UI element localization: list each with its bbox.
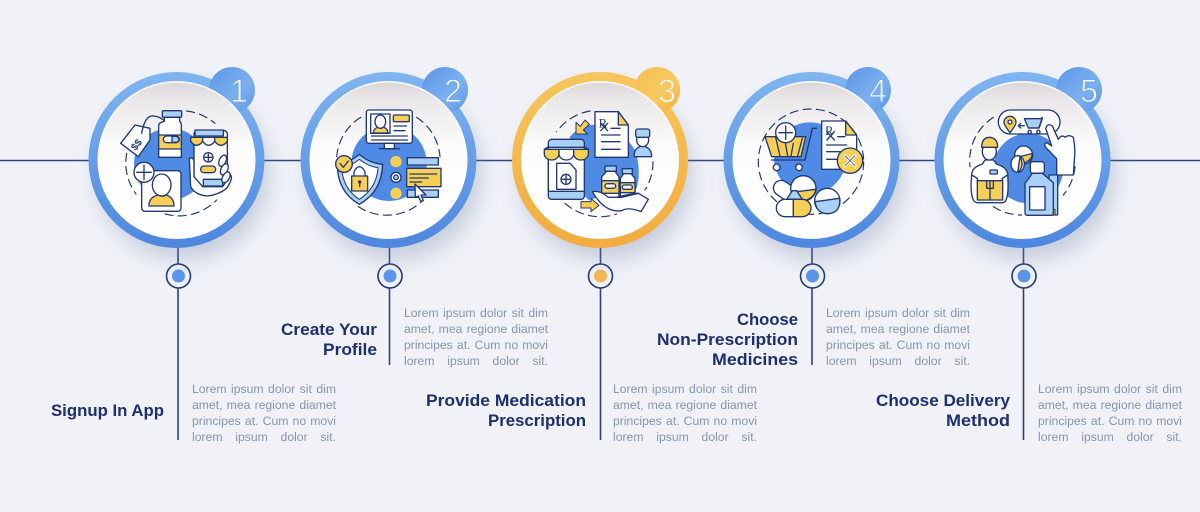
text block 2: Lorem ipsum dolor sit dim bbox=[404, 306, 548, 320]
medallion 1 bbox=[88, 67, 269, 260]
icon: non-prescription medicines: R bbox=[825, 124, 834, 138]
text block 4: Lorem ipsum dolor sit dim bbox=[826, 306, 970, 320]
step 3 graphic bbox=[512, 67, 692, 440]
heading: Choose Delivery Method: Choose Delivery bbox=[876, 391, 1011, 410]
connector and marker 4 bbox=[800, 245, 824, 365]
text block 4 bbox=[826, 306, 970, 368]
text block 1 bbox=[192, 382, 336, 444]
text block 4: amet, mea regione diamet bbox=[826, 322, 970, 336]
timeline line bbox=[0, 160, 1200, 162]
text block 3: Lorem ipsum dolor sit dim bbox=[613, 382, 757, 396]
heading: Provide Medication Prescription bbox=[426, 391, 586, 430]
text block 3 bbox=[613, 382, 757, 444]
heading: Choose Non-Prescription Medicines: Choose bbox=[737, 310, 798, 329]
heading: Create Your Profile bbox=[281, 320, 377, 359]
step 1 graphic bbox=[88, 67, 269, 440]
icon: non-prescription medicines bbox=[758, 109, 864, 217]
connector and marker 2 bbox=[378, 245, 402, 365]
text block 3: lorem ipsum dolor sit. bbox=[613, 430, 757, 444]
text block 5: lorem ipsum dolor sit. bbox=[1038, 430, 1182, 444]
number 2: 2 bbox=[444, 73, 462, 109]
text block 2: principes at. Cum no movi bbox=[404, 338, 548, 352]
number 3: 3 bbox=[658, 73, 676, 109]
number 1: 1 bbox=[230, 73, 248, 109]
icon: profile security bbox=[336, 110, 441, 215]
heading: Create Your Profile: Profile bbox=[323, 340, 377, 359]
heading: Choose Delivery Method bbox=[876, 391, 1011, 430]
step 4 graphic bbox=[724, 67, 904, 365]
text block 1: amet, mea regione diamet bbox=[192, 398, 336, 412]
medallion 2 bbox=[300, 67, 481, 260]
text block 1: principes at. Cum no movi bbox=[192, 414, 336, 428]
medallion 5 bbox=[934, 67, 1115, 260]
text block 5: principes at. Cum no movi bbox=[1038, 414, 1182, 428]
text block 3: principes at. Cum no movi bbox=[613, 414, 757, 428]
number 5: 5 bbox=[1080, 73, 1098, 109]
step 2 graphic bbox=[300, 67, 481, 365]
text block 5: Lorem ipsum dolor sit dim bbox=[1038, 382, 1182, 396]
heading: Provide Medication Prescription: Prescription bbox=[488, 411, 586, 430]
heading: Create Your Profile: Create Your bbox=[281, 320, 377, 339]
step 5 graphic bbox=[934, 67, 1115, 440]
connector and marker 1 bbox=[166, 245, 190, 440]
text block 2 bbox=[404, 306, 548, 368]
text block 1: lorem ipsum dolor sit. bbox=[192, 430, 336, 444]
text block 5: amet, mea regione diamet bbox=[1038, 398, 1182, 412]
heading: Choose Non-Prescription Medicines: Non-Prescription bbox=[657, 330, 798, 349]
connector and marker 3 bbox=[588, 245, 612, 440]
heading: Signup In App: Signup In App bbox=[51, 401, 164, 420]
medallion 4 bbox=[724, 67, 904, 260]
icon: pharmacy app signup bbox=[121, 111, 232, 216]
connector and marker 5 bbox=[1012, 245, 1036, 440]
text block 3: amet, mea regione diamet bbox=[613, 398, 757, 412]
icon: medication prescription: R bbox=[599, 116, 608, 130]
medallion 3 bbox=[512, 67, 692, 260]
text block 2: amet, mea regione diamet bbox=[404, 322, 548, 336]
heading: Choose Non-Prescription Medicines bbox=[657, 310, 798, 369]
number 4: 4 bbox=[869, 73, 887, 109]
heading: Choose Delivery Method: Method bbox=[946, 411, 1010, 430]
heading: Provide Medication Prescription: Provide Medication bbox=[426, 391, 586, 410]
icon: pharmacy app signup: $$ bbox=[129, 137, 145, 153]
icon: delivery method bbox=[970, 110, 1075, 215]
text block 5 bbox=[1038, 382, 1182, 444]
text block 2: lorem ipsum dolor sit. bbox=[404, 354, 548, 368]
text block 4: lorem ipsum dolor sit. bbox=[826, 354, 970, 368]
icon: medication prescription bbox=[544, 111, 653, 217]
text block 1: Lorem ipsum dolor sit dim bbox=[192, 382, 336, 396]
text block 4: principes at. Cum no movi bbox=[826, 338, 970, 352]
heading: Choose Non-Prescription Medicines: Medicines bbox=[712, 350, 798, 369]
